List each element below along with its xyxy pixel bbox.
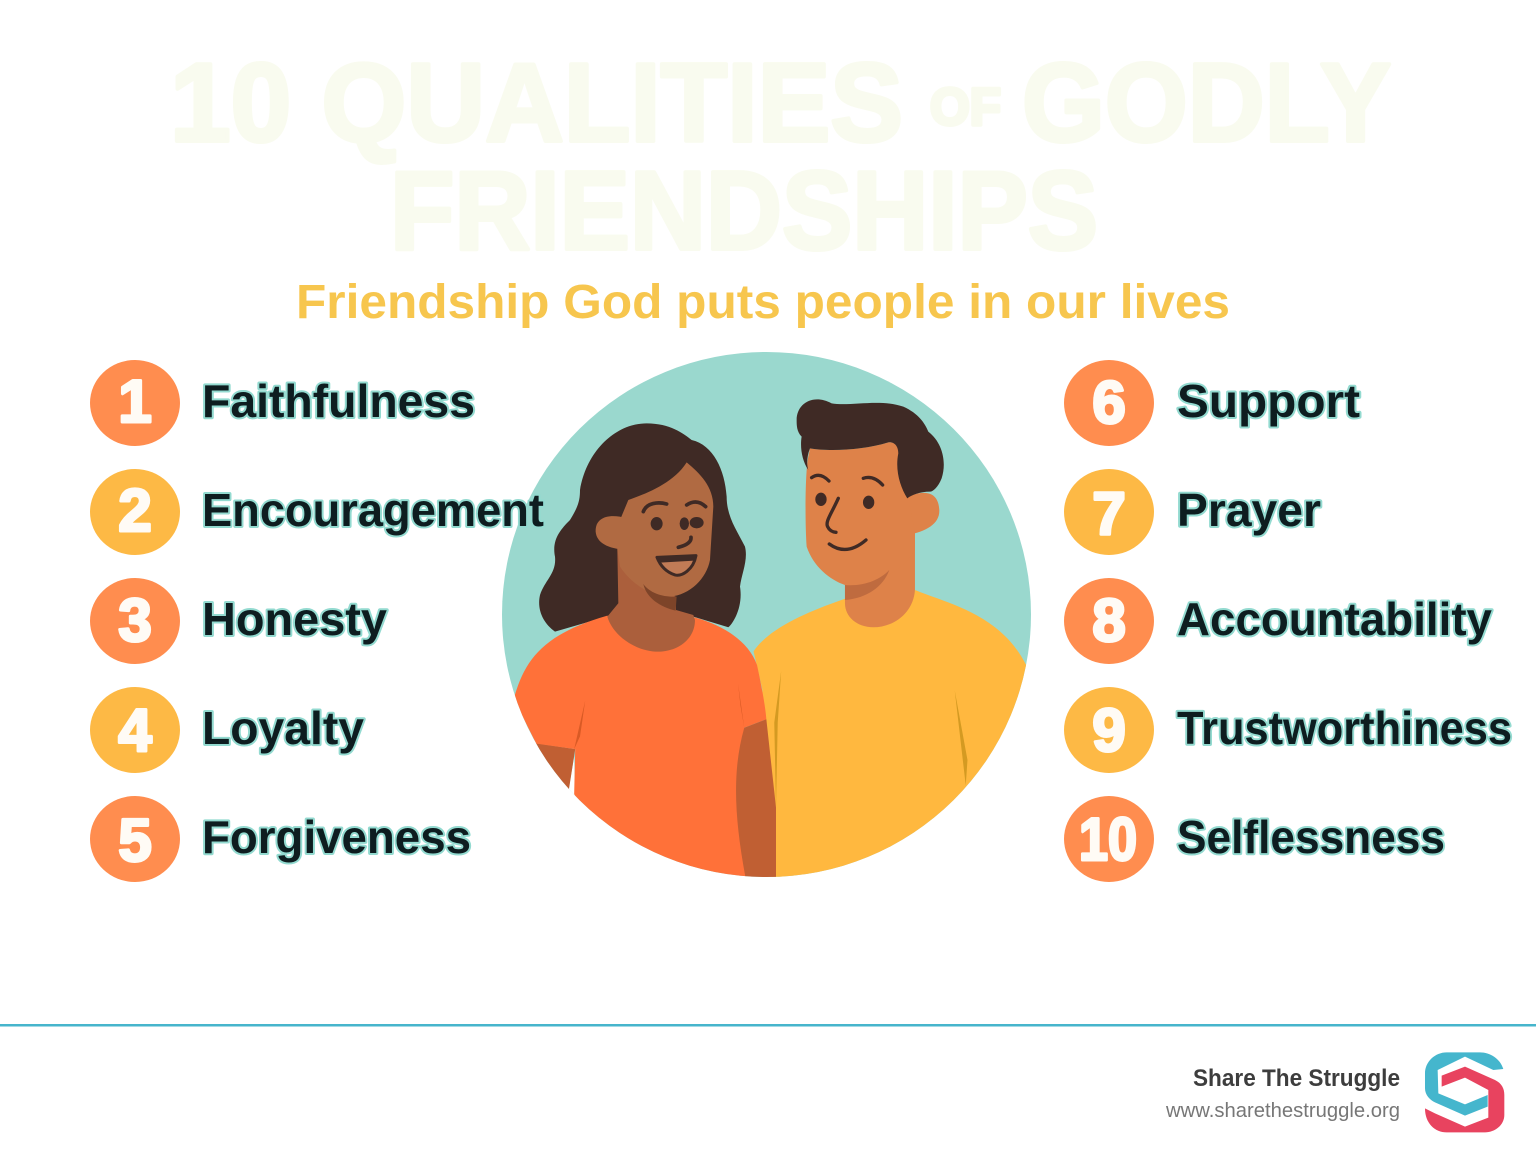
item 8 label: Accountability <box>1177 593 1492 645</box>
item 2 badge: 2 <box>118 477 152 544</box>
item 10 label: Selflessness <box>1177 811 1445 863</box>
item 1 label: Faithfulness <box>202 375 475 427</box>
item 7 badge <box>1064 469 1154 555</box>
item 1 badge: 1 <box>118 368 152 435</box>
item 3 badge <box>90 578 180 664</box>
item 4 badge: 4 <box>118 697 152 764</box>
woman: shirt and arms <box>514 616 776 892</box>
footer divider <box>0 1024 1536 1026</box>
item 2 label: Encouragement <box>202 484 544 536</box>
title <box>170 41 1391 273</box>
item 7 badge: 7 <box>1092 480 1126 547</box>
list: qualities 6 to 10 <box>1064 360 1512 882</box>
item 10 badge: 10 <box>1079 806 1137 873</box>
illustration: two friends in a teal circle <box>502 352 1038 892</box>
item 5 badge: 5 <box>118 807 152 874</box>
man: shirt and folds <box>754 590 1038 892</box>
item 2 badge <box>90 469 180 555</box>
item 4 badge <box>90 687 180 773</box>
footer url: www.sharethestruggle.org <box>1165 1099 1400 1122</box>
item 8 badge <box>1064 578 1154 664</box>
item 8 badge: 8 <box>1092 587 1126 654</box>
item 1 badge <box>90 360 180 446</box>
woman: hair <box>539 423 746 632</box>
item 3 label: Honesty <box>202 593 387 645</box>
item 9 badge <box>1064 687 1154 773</box>
item 6 badge <box>1064 360 1154 446</box>
title: GODLY <box>1022 41 1391 165</box>
subtitle: Friendship God puts people in our lives <box>296 276 1230 329</box>
item 6 badge: 6 <box>1092 369 1126 436</box>
icon: Share The Struggle logo <box>1425 1052 1504 1132</box>
woman: head <box>596 462 713 652</box>
title: 10 QUALITIES <box>170 41 903 165</box>
item 3 badge: 3 <box>118 587 152 654</box>
item 9 label: Trustworthiness <box>1177 702 1512 754</box>
title: OF <box>930 78 1001 136</box>
list: qualities 1 to 5 <box>90 360 544 882</box>
man: head <box>797 399 944 627</box>
item 5 label: Forgiveness <box>202 811 471 863</box>
item 10 badge <box>1064 796 1154 882</box>
item 5 badge <box>90 796 180 882</box>
item 4 label: Loyalty <box>202 702 364 754</box>
item 7 label: Prayer <box>1177 484 1321 536</box>
item 6 label: Support <box>1177 375 1360 427</box>
item 9 badge: 9 <box>1092 697 1126 764</box>
title: FRIENDSHIPS <box>390 149 1098 273</box>
footer brand name: Share The Struggle <box>1193 1065 1400 1092</box>
